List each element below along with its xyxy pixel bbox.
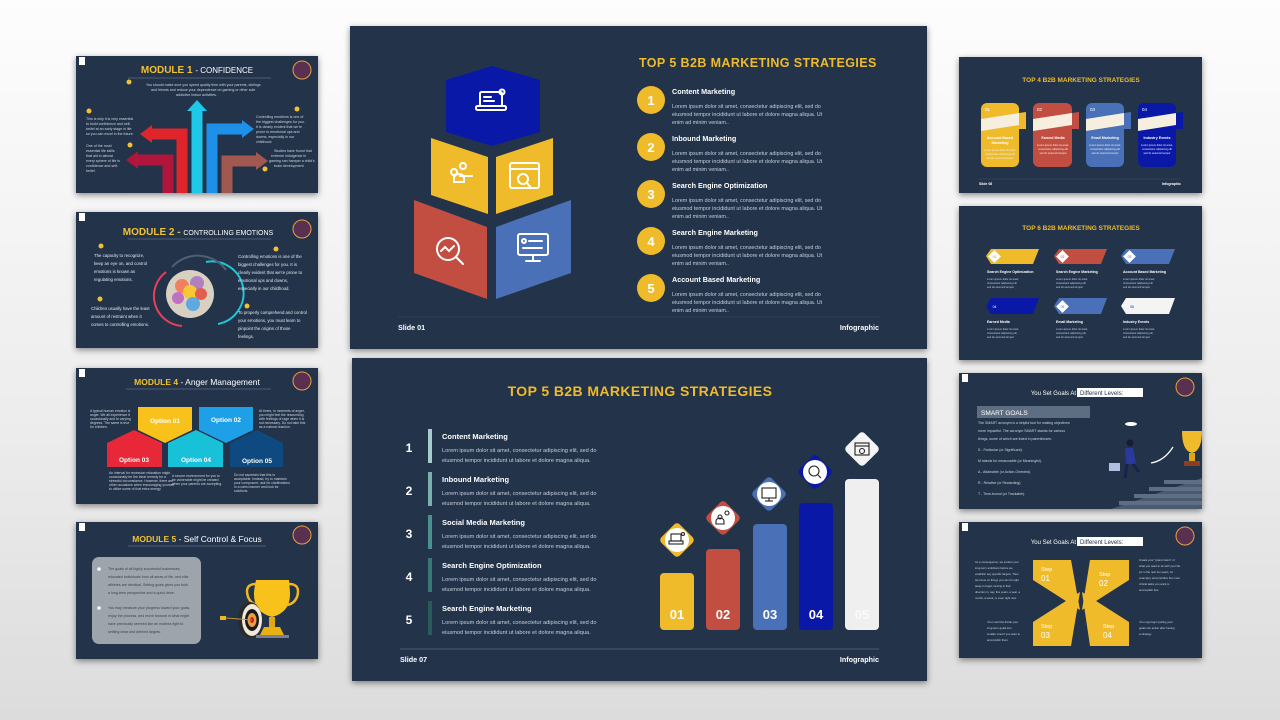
list items: 5 [647, 281, 655, 296]
thumbnail: module 4 anger management: with feelings of rage when it is [259, 417, 305, 421]
thumbnail: module 4 anger management: you might feel the resounding [259, 413, 304, 417]
thumbnail: top 6 B2B strategies: Lorem ipsum dolor sit amet, [1123, 277, 1155, 281]
thumbnail: steps goals: You may begin putting your [1139, 620, 1173, 624]
thumbnail: module 2 controlling emotions: pinpoint the origins of those [238, 326, 291, 331]
thumbnail: module 4 anger management: other occasions when encouraging yourself [109, 483, 174, 487]
list items: 4 [647, 234, 655, 249]
thumbnail: smart goals: more impactful. The acronym SMART stands for various [978, 429, 1065, 433]
thumbnail: module 5 self control [76, 522, 318, 659]
bar chart: 05 [855, 607, 869, 622]
thumbnail: top 6 B2B strategies: TOP 6 B2B MARKETING STRATEGIES [1022, 225, 1140, 232]
thumbnail: steps goals: Step [1103, 624, 1114, 630]
thumbnail: module 1 confidence: This is why it is very essential [86, 117, 133, 121]
numbered list: Lorem ipsum dolor sit amet, consectetur adipiscing elit, sed do [442, 491, 597, 497]
footer: Slide 07 [400, 655, 427, 664]
thumbnail: module 2 controlling emotions: regulating emotions. [94, 277, 133, 282]
thumbnail: top 4 B2B strategies: Earned Media [1041, 136, 1066, 140]
slide 01: top 5 B2B marketing strategies (cubes): Lorem ipsum dolor sit amet, consectetur adipiscing elit, sed do [672, 151, 821, 157]
numbered list: Lorem ipsum dolor sit amet, consectetur adipiscing elit, sed do [442, 534, 597, 540]
slide 01: top 5 B2B marketing strategies (cubes): Lorem ipsum dolor sit amet, consectetur adipiscing elit, sed do [672, 245, 821, 251]
list items [637, 86, 767, 302]
bar chart: 02 [716, 607, 730, 622]
bar chart: 03 [763, 607, 777, 622]
thumbnail: steps goals: Step [1041, 624, 1052, 630]
thumbnail: module 4 anger management: solutions. [234, 489, 248, 493]
thumbnail: smart goals [959, 373, 1202, 509]
thumbnail: top 4 B2B strategies: sed do eiusmod tempor [986, 156, 1014, 160]
thumbnail: module 2 controlling emotions: MODULE 2 - CONTROLLING EMOTIONS [123, 227, 274, 238]
thumbnail: module 1 confidence: so you can excel in the future. [86, 132, 134, 136]
numbered list [406, 429, 597, 636]
thumbnail: top 6 B2B strategies: sed do eiusmod tempor [1123, 335, 1150, 339]
thumbnail: top 6 B2B strategies: consectetur adipiscing elit [987, 281, 1017, 285]
numbered list: Search Engine Optimization [442, 561, 542, 570]
thumbnail: top 6 B2B strategies: sed do eiusmod tempor [1056, 335, 1083, 339]
thumbnail: module 1 confidence: It is clearly evident that we're [256, 125, 302, 129]
thumbnail: module 5 self control: MODULE 5 - Self Control & Focus [132, 534, 262, 544]
thumbnail: steps goals: 03 [1041, 631, 1050, 640]
slide 07: top 5 B2B marketing strategies (bar chart) [352, 358, 927, 681]
thumbnail: top 4 B2B strategies: 01 [985, 107, 991, 112]
thumbnail: steps goals: example), and prioritize the most [1139, 576, 1180, 580]
thumbnail: top 6 B2B strategies: Lorem ipsum dolor sit amet, [987, 277, 1019, 281]
numbered list: 1 [406, 441, 413, 455]
slide 01: top 5 B2B marketing strategies (cubes): eiusmod tempor incididunt ut labore et dolore magna aliqua. Ut [672, 159, 823, 165]
list items: Content Marketing [672, 87, 735, 96]
slide 01: top 5 B2B marketing strategies (cubes): eiusmod tempor incididunt ut labore et dolore magna aliqua. Ut [672, 206, 823, 212]
bar chart: 01 [670, 607, 684, 622]
thumbnail: top 4 B2B strategies: TOP 4 B2B MARKETING STRATEGIES [1022, 77, 1140, 84]
thumbnail: module 2 controlling emotions: The capacity to recognize, [94, 253, 144, 258]
thumbnail: steps goals: long-term goals into [987, 626, 1012, 630]
thumbnail: top 6 B2B strategies: 02 [1061, 255, 1064, 259]
thumbnail: module 1 confidence: One of the most [86, 144, 112, 148]
thumbnail: module 4 anger management: Option 03 [119, 457, 149, 464]
thumbnail: module 1 confidence: to build confidence and self- [86, 122, 132, 126]
thumbnail: module 2 controlling emotions: biggest challenges for you. It is [238, 262, 297, 267]
thumbnail: module 1 confidence: prone to emotional ups and [256, 130, 300, 134]
thumbnail: module 4 anger management: your composure, ask for clarifications [234, 481, 290, 485]
thumbnail: module 2 controlling emotions: To properly comprehend and control [238, 310, 307, 315]
thumbnail: module 4 anger management: Option 04 [181, 457, 211, 464]
thumbnail: module 2 controlling emotions: comes to controlling emotions. [91, 322, 149, 327]
thumbnail: top 4 B2B strategies: sed do eiusmod tempor [1143, 151, 1171, 155]
thumbnail: top 4 B2B strategies: 02 [1037, 107, 1043, 112]
thumbnail: module 1 confidence: that aid in almost [86, 154, 113, 158]
thumbnail: module 1 confidence: belief at an early stage in life [86, 127, 132, 131]
numbered list: 4 [406, 570, 413, 584]
numbered list: Social Media Marketing [442, 518, 525, 527]
numbered list: 5 [406, 613, 413, 627]
thumbnail: module 1 confidence: childhood. [256, 140, 272, 144]
bar chart: 04 [809, 607, 824, 622]
thumbnail: module 4 anger management: as a natural reaction. [259, 425, 291, 429]
thumbnail: steps goals: As a consequence, we endure your [975, 560, 1019, 564]
slide 01: top 5 B2B marketing strategies (cubes): Lorem ipsum dolor sit amet, consectetur adipiscing elit, sed do [672, 198, 821, 204]
list items: Search Engine Optimization [672, 181, 767, 190]
thumbnail: top 6 B2B strategies: Search Engine Optimization [987, 270, 1033, 274]
list items: 3 [647, 187, 655, 202]
thumbnail: module 2 controlling emotions: keep an eye on, and control [94, 261, 147, 266]
thumbnail: top 6 B2B strategies: Account Based Marketing [1123, 270, 1166, 274]
numbered list: 3 [406, 527, 413, 541]
slide 01: top 5 B2B marketing strategies (cubes): enim ad minim veniam.. [672, 214, 729, 220]
thumbnail: module 4 anger management: in a calm manner and look for [234, 485, 280, 489]
numbered list: eiusmod tempor incididunt ut labore et dolore magna aliqua. [442, 458, 591, 464]
thumbnail: module 4 anger management: Option 02 [211, 417, 241, 424]
thumbnail: module 4 anger management: for children. [90, 425, 108, 429]
thumbnail: top 4 B2B strategies: consectetur adipiscing elit [985, 152, 1015, 156]
thumbnail: steps goals: direction in, say, five years, a year, a [975, 590, 1020, 594]
numbered list: Lorem ipsum dolor sit amet, consectetur adipiscing elit, sed do [442, 620, 597, 626]
thumbnail: module 2 controlling emotions: emotional ups and downs, [238, 278, 288, 283]
thumbnail: steps goals: You Set Goals At [1031, 540, 1076, 546]
thumbnail: top 6 B2B strategies: 04 [993, 305, 996, 309]
thumbnail: steps goals: 04 [1103, 631, 1112, 640]
thumbnail: module 1 confidence: You should make sure you spend quality time with your parents, siblings [146, 83, 261, 87]
thumbnail: module 4 anger management: A secure environment for you to [172, 474, 220, 478]
thumbnail: top 4 B2B strategies: 03 [1090, 107, 1096, 112]
thumbnail: module 2 controlling emotions: your emotions, you must learn to [238, 318, 301, 323]
thumbnail: steps goals: Different Levels: [1080, 540, 1124, 546]
thumbnail: top 6 B2B strategies: consectetur adipiscing elit [1056, 331, 1086, 335]
thumbnail: top 4 B2B strategies: Lorem ipsum dolor sit amet, [984, 148, 1016, 152]
thumbnail: module 4 anger management [76, 368, 318, 504]
thumbnail: steps goals: away to begin moving in that [975, 584, 1011, 588]
thumbnail: top 6 B2B strategies: 01 [993, 255, 996, 259]
numbered list: Lorem ipsum dolor sit amet, consectetur adipiscing elit, sed do [442, 448, 597, 454]
thumbnail: steps goals: month, a week, or even right now. [975, 596, 1017, 600]
slide 07: top 5 B2B marketing strategies (bar chart): Infographic [840, 655, 879, 664]
thumbnail: module 4 anger management: Option 05 [242, 458, 272, 465]
thumbnail: smart goals: R - Relative (or Rewarding). [978, 481, 1021, 485]
list items: 2 [647, 140, 655, 155]
thumbnail: module 4 anger management: An interval for recession relaxation might [109, 471, 170, 475]
list items: Inbound Marketing [672, 134, 736, 143]
thumbnail: top 6 B2B strategies: Lorem ipsum dolor sit amet, [1056, 277, 1088, 281]
thumbnail: module 1 confidence: MODULE 1 - CONFIDENCE [141, 65, 253, 76]
numbered list: Search Engine Marketing [442, 604, 532, 613]
thumbnail: top 6 B2B strategies: Search Engine Marketing [1056, 270, 1098, 274]
thumbnail: module 1 confidence [76, 56, 318, 193]
slide 01: top 5 B2B marketing strategies (cubes): eiusmod tempor incididunt ut labore et dolore magna aliqua. Ut [672, 253, 823, 259]
thumbnail: top 4 B2B strategies: Infographic [1162, 182, 1181, 186]
thumbnail: top 4 B2B strategies [959, 57, 1202, 193]
thumbnail: module 1 confidence: the biggest challenges for you. [256, 120, 305, 124]
thumbnail: module 5 self control: a long-term perspective and a quick drive. [108, 591, 175, 595]
thumbnail: top 4 B2B strategies: Lorem ipsum dolor sit amet, [1141, 143, 1173, 147]
thumbnail: module 4 anger management: A typical human emotion is [90, 409, 131, 413]
thumbnail: top 6 B2B strategies: consectetur adipiscing elit [1056, 281, 1086, 285]
thumbnail: module 4 anger management: when your parents are accepting. [172, 482, 222, 486]
thumbnail: module 1 confidence: essential life skills [86, 149, 115, 153]
thumbnail: top 4 B2B strategies: sed do eiusmod tempor [1039, 151, 1067, 155]
bar chart [659, 431, 880, 630]
thumbnail: module 1 confidence: and friends and reduce your dependence on gaming or other sole [151, 88, 255, 92]
thumbnail: top 4 B2B strategies: Slide 08 [979, 182, 992, 186]
thumbnail: module 2 controlling emotions: amount of restraint when it [91, 314, 142, 319]
thumbnail: top 6 B2B strategies: consectetur adipiscing elit [1123, 331, 1153, 335]
numbered list: Inbound Marketing [442, 475, 509, 484]
thumbnail: top 6 B2B strategies: Email Marketing [1056, 320, 1083, 324]
thumbnail: module 4 anger management: degrees. The same is true [90, 421, 129, 425]
thumbnail: module 1 confidence: downs, especially in our [256, 135, 295, 139]
thumbnail: module 1 confidence: every sphere of life is [86, 159, 120, 163]
thumbnail: steps goals: You must first divide your [987, 620, 1018, 624]
numbered list: eiusmod tempor incididunt ut labore et dolore magna aliqua. [442, 587, 591, 593]
slide 01: top 5 B2B marketing strategies (cubes): Infographic [840, 323, 879, 332]
thumbnail: smart goals: things, some of which are listed in parentheses: [978, 437, 1052, 441]
thumbnail: top 6 B2B strategies: 05 [1061, 305, 1064, 309]
thumbnail: module 2 controlling emotions: especially in our childhood. [238, 286, 290, 291]
thumbnail: steps goals: smaller ones if you want to [987, 632, 1021, 636]
thumbnail: steps goals: what you want to do with your life [1139, 564, 1181, 568]
thumbnail: top 4 B2B strategies: sed do eiusmod tempor [1091, 151, 1119, 155]
thumbnail: module 5 self control: enjoy the process, and move forward in what might [108, 614, 189, 618]
thumbnail: module 4 anger management: Option 01 [150, 418, 180, 425]
thumbnail: module 4 anger management: anger. We all experience it [90, 413, 130, 417]
thumbnail: top 4 B2B strategies: consectetur adipiscing elit [1142, 147, 1172, 151]
thumbnail: module 1 confidence: belief. [86, 169, 96, 173]
thumbnail: top 6 B2B strategies: sed do eiusmod tempor [1056, 285, 1083, 289]
slide 01: top 5 B2B marketing strategies (cubes): eiusmod tempor incididunt ut labore et dolore magna aliqua. Ut [672, 300, 823, 306]
thumbnail: smart goals: A - Attainable (or Action-Oriented). [978, 470, 1031, 474]
thumbnail: module 2 controlling emotions: emotions is known as [94, 269, 135, 274]
slide 01: top 5 B2B marketing strategies (cubes) [350, 26, 927, 349]
thumbnail: smart goals: Different Levels: [1080, 391, 1124, 397]
numbered list: eiusmod tempor incididunt ut labore et dolore magna aliqua. [442, 630, 591, 636]
slide 01: top 5 B2B marketing strategies (cubes): enim ad minim veniam.. [672, 120, 729, 126]
thumbnail: steps goals: accomplish first. [1139, 588, 1159, 592]
numbered list: 2 [406, 484, 413, 498]
thumbnail: module 4 anger management: stressful circumstance. However, there are [109, 479, 173, 483]
thumbnail: module 4 anger management: At times, in moments of anger, [259, 409, 305, 413]
thumbnail: steps goals: a strategy. [1139, 632, 1152, 636]
thumbnail: top 6 B2B strategies: 06 [1130, 305, 1134, 309]
thumbnail: steps goals: 01 [1041, 574, 1050, 583]
thumbnail: top 6 B2B strategies [959, 206, 1202, 360]
thumbnail: top 6 B2B strategies: Lorem ipsum dolor sit amet, [987, 327, 1019, 331]
title: TOP 5 B2B MARKETING STRATEGIES [639, 56, 877, 70]
thumbnail: module 1 confidence: Studies have found that [274, 149, 312, 153]
thumbnail: module 2 controlling emotions: feelings. [238, 334, 254, 339]
thumbnail: module 5 self control: educated individuals from all areas of life, and elite [108, 575, 189, 579]
thumbnail: top 6 B2B strategies: consectetur adipiscing elit [987, 331, 1017, 335]
thumbnail: smart goals: M stands for measurable (or Meaningful). [978, 459, 1042, 463]
thumbnail: top 4 B2B strategies: Email Marketing [1091, 136, 1119, 140]
thumbnail: smart goals: The SMART acronym is a helpful tool for making objectives [978, 421, 1070, 425]
thumbnail: module 4 anger management: not necessary. Do not take this [259, 421, 306, 425]
numbered list: eiusmod tempor incididunt ut labore et dolore magna aliqua. [442, 501, 591, 507]
thumbnail: module 5 self control: You may measure your progress toward your goals, [108, 606, 190, 610]
thumbnail: top 4 B2B strategies: Lorem ipsum dolor sit amet, [1089, 143, 1121, 147]
thumbnail: top 6 B2B strategies: Industry Events [1123, 320, 1149, 324]
numbered list: eiusmod tempor incididunt ut labore et dolore magna aliqua. [442, 544, 591, 550]
thumbnail: top 6 B2B strategies: sed do eiusmod tempor [987, 285, 1014, 289]
thumbnail: module 5 self control: The goals of all highly successful businesses, [108, 567, 181, 571]
icon cubes [414, 66, 571, 299]
thumbnail: module 4 anger management: occasionally be the ideal remedy for a [109, 475, 166, 479]
list items: 1 [647, 93, 655, 108]
thumbnail: top 4 B2B strategies: 04 [1142, 107, 1148, 112]
thumbnail: module 4 anger management: occasionally and to varying [90, 417, 131, 421]
thumbnail: module 4 anger management: acceptable. Instead, try to maintain [234, 477, 287, 481]
thumbnail: module 5 self control: athletes are identical. Setting goals gives you both [108, 583, 188, 587]
thumbnail: module 4 anger management: be vulnerable might be created [172, 478, 219, 482]
thumbnail: module 4 anger management: to utilize some of that extra energy [109, 487, 161, 491]
thumbnail: top 6 B2B strategies: sed do eiusmod tempor [987, 335, 1014, 339]
thumbnail: module 1 confidence: extreme indulgence in [271, 154, 306, 158]
thumbnail: top 6 B2B strategies: 03 [1128, 255, 1131, 259]
thumbnail: steps goals: (or in the next ten years, for [1139, 570, 1173, 574]
thumbnail: module 5 self control: have previously seemed like an endless fight to [108, 622, 183, 626]
thumbnail: module 2 controlling emotions: Children usually have the least [91, 306, 150, 311]
thumbnail: steps goals: long-term ambitions before we [975, 566, 1013, 570]
thumbnail: top 4 B2B strategies: Marketing [992, 141, 1008, 145]
thumbnail: smart goals: You Set Goals At [1031, 391, 1076, 397]
thumbnail: top 6 B2B strategies: Lorem ipsum dolor sit amet, [1123, 327, 1155, 331]
thumbnail: module 5 self control: settling clear and defined targets. [108, 630, 161, 634]
thumbnail: steps goals: 02 [1099, 579, 1108, 588]
slide 01: top 5 B2B marketing strategies (cubes): Lorem ipsum dolor sit amet, consectetur adipiscing elit, sed do [672, 104, 821, 110]
list items: Account Based Marketing [672, 275, 760, 284]
thumbnail: steps goals: Step [1041, 567, 1052, 573]
thumbnail: smart goals: T - Time-bound (or Trackable). [978, 492, 1025, 496]
thumbnail: top 6 B2B strategies: sed do eiusmod tempor [1123, 285, 1150, 289]
thumbnail: module 2 controlling emotions: clearly evident that we're prone to [238, 270, 303, 275]
thumbnail: steps goals: we focus on things you can do right [975, 578, 1019, 582]
thumbnail: smart goals: S - Particular (or Significant). [978, 448, 1023, 452]
thumbnail: module 1 confidence: brain development [274, 164, 304, 168]
title: TOP 5 B2B MARKETING STRATEGIES [508, 383, 772, 399]
thumbnail: module 1 confidence: gaming can hamper a child's [269, 159, 315, 163]
thumbnail: module 1 confidence: addictive indoor activities. [176, 93, 217, 97]
thumbnail: top 6 B2B strategies: Lorem ipsum dolor sit amet, [1056, 327, 1088, 331]
footer: Slide 01 [398, 323, 425, 332]
thumbnail: steps goals: establish any specific targets. Then [975, 572, 1019, 576]
slide 01: top 5 B2B marketing strategies (cubes): enim ad minim veniam.. [672, 261, 729, 267]
thumbnail: top 4 B2B strategies: consectetur adipiscing elit [1038, 147, 1068, 151]
thumbnail: top 4 B2B strategies: Account Based [987, 136, 1013, 140]
thumbnail: steps goals: critical tasks you want to [1139, 582, 1170, 586]
thumbnail: smart goals: SMART GOALS [981, 410, 1028, 417]
slide 01: top 5 B2B marketing strategies (cubes): enim ad minim veniam.. [672, 308, 729, 314]
thumbnail: top 4 B2B strategies: consectetur adipiscing elit [1090, 147, 1120, 151]
slide 01: top 5 B2B marketing strategies (cubes): eiusmod tempor incididunt ut labore et dolore magna aliqua. Ut [672, 112, 823, 118]
thumbnail: top 4 B2B strategies: Industry Events [1144, 136, 1170, 140]
thumbnail: top 4 B2B strategies: Lorem ipsum dolor sit amet, [1037, 143, 1069, 147]
thumbnail: top 6 B2B strategies: Earned Media [987, 320, 1010, 324]
thumbnail: steps goals [959, 522, 1202, 658]
thumbnail: module 4 anger management: Do not ascertain that this is [234, 473, 275, 477]
thumbnail: steps goals: goals into action after having [1139, 626, 1175, 630]
thumbnail: module 2 controlling emotions: Controlling emotions is one of the [238, 254, 302, 259]
thumbnail: top 6 B2B strategies: consectetur adipiscing elit [1123, 281, 1153, 285]
thumbnail: module 4 anger management: MODULE 4 - Anger Management [134, 377, 260, 387]
thumbnail: module 2 controlling emotions [76, 212, 318, 348]
slide 01: top 5 B2B marketing strategies (cubes): enim ad minim veniam.. [672, 167, 729, 173]
thumbnail: steps goals: accomplish them. [987, 638, 1009, 642]
numbered list: Content Marketing [442, 432, 508, 441]
list items: Search Engine Marketing [672, 228, 758, 237]
thumbnail: module 1 confidence: Controlling emotions is one of [256, 115, 303, 119]
numbered list: Lorem ipsum dolor sit amet, consectetur adipiscing elit, sed do [442, 577, 597, 583]
slide 01: top 5 B2B marketing strategies (cubes): Lorem ipsum dolor sit amet, consectetur adipiscing elit, sed do [672, 292, 821, 298]
thumbnail: steps goals: Step [1099, 572, 1110, 578]
thumbnail: module 1 confidence: confidence and self- [86, 164, 119, 168]
thumbnail: steps goals: Create your "grand vision" of [1139, 558, 1175, 562]
